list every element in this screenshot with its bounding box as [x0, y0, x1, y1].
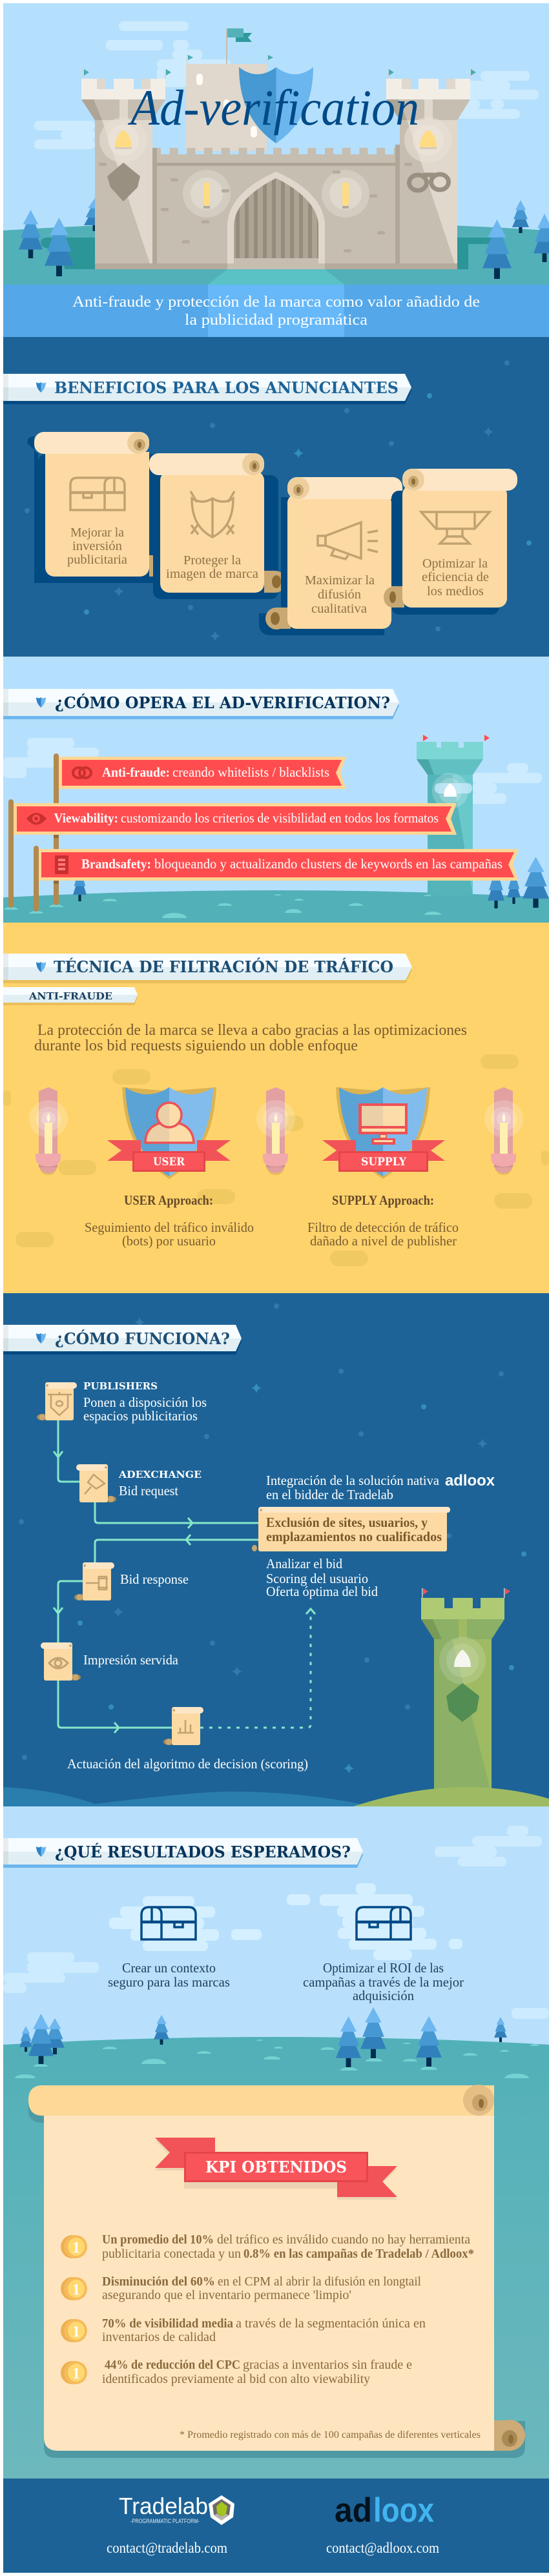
subtitle: Anti-fraude y protección de la marca como valor añadido de — [72, 294, 480, 311]
intro text — [34, 1022, 467, 1054]
footnote: * Promedio registrado con más de 100 campañas de diferentes verticales — [180, 2429, 481, 2440]
text: los medios — [427, 584, 484, 598]
kpi ribbon: KPI OBTENIDOS — [205, 2158, 347, 2176]
result text 2 — [303, 1960, 464, 2003]
text: imagen de marca — [166, 567, 258, 581]
text: customizando los criterios de visibilidad en todos los formatos — [121, 810, 439, 826]
user approach text: USER Approach: — [124, 1192, 213, 1208]
step: publishers — [37, 1380, 207, 1424]
kpi 4: 44% de reducción del CPC — [105, 2358, 240, 2372]
flow lines — [54, 1420, 315, 1733]
panel: kpi scroll — [28, 2085, 525, 2458]
text: Bid request — [119, 1483, 178, 1498]
road — [208, 269, 344, 285]
logo: adloox: ad — [335, 2491, 372, 2530]
candle 2 — [256, 1087, 295, 1175]
central keep — [186, 64, 267, 151]
step: algoritmo — [67, 1707, 308, 1772]
integration text: en el bidder de Tradelab — [266, 1487, 393, 1502]
text: espacios publicitarios — [83, 1408, 198, 1424]
panel: como funciona — [3, 1293, 549, 1806]
heading — [3, 1838, 363, 1868]
kpi 2 — [61, 2274, 421, 2302]
user approach text: (bots) por usuario — [122, 1233, 216, 1249]
left tower — [81, 69, 171, 269]
text: Bid response — [120, 1571, 189, 1587]
dots and stars — [19, 1303, 526, 1774]
icon: user — [145, 1103, 194, 1143]
heading: ¿QUÉ RESULTADOS ESPERAMOS? — [55, 1843, 351, 1861]
analysis text: Oferta óptima del bid — [266, 1584, 378, 1599]
panel: footer — [3, 2479, 549, 2573]
ribbon: SUPPLY — [361, 1156, 407, 1169]
flag 1: anti-fraude — [54, 753, 346, 905]
blobs — [3, 1054, 549, 1266]
shadow — [28, 2101, 525, 2458]
logo: tradelab: -PROGRAMMATIC PLATFORM- — [130, 2518, 200, 2524]
heading: ¿CÓMO FUNCIONA? — [55, 1329, 230, 1348]
text: Brandsafety: — [81, 856, 151, 872]
kpi 1: 1 — [72, 2240, 80, 2256]
body — [44, 2111, 494, 2451]
text — [166, 553, 258, 581]
heading — [3, 954, 412, 983]
text — [305, 573, 375, 616]
analysis text — [266, 1556, 378, 1599]
tower — [417, 735, 490, 895]
text: Actuación del algoritmo de decision (scoring) — [67, 1756, 308, 1772]
kpi ribbon — [155, 2138, 397, 2200]
text: Mejorar la — [70, 526, 124, 540]
text — [102, 764, 329, 780]
panel: beneficios — [3, 337, 549, 657]
ribbon — [322, 1140, 445, 1172]
logo: tradelab: Tradelab — [119, 2493, 208, 2519]
clouds — [3, 738, 542, 804]
text — [266, 1515, 442, 1544]
kpi 2: en el CPM al abrir la difusión en longtail — [218, 2274, 421, 2289]
text: inversión — [72, 539, 122, 553]
kpi 4 — [61, 2358, 412, 2386]
scroll 2 — [149, 453, 286, 599]
text — [83, 1380, 207, 1424]
icon: tower shield — [107, 163, 140, 201]
step: bid response — [74, 1562, 189, 1600]
user approach text — [85, 1192, 254, 1249]
kpi 3: a través de la segmentación única en — [236, 2316, 426, 2331]
green tower — [421, 1588, 510, 1794]
kpi 1: 0.8% en las campañas de Tradelab / Adloox* — [243, 2247, 474, 2261]
icon: bars — [178, 1720, 194, 1733]
result text 1: Crear un contexto — [122, 1960, 216, 1976]
result text 2: campañas a través de la mejor — [303, 1974, 464, 1990]
text — [422, 557, 489, 598]
kpi 1: publicitaria conectada y un — [102, 2247, 241, 2261]
icon: anvil — [421, 512, 490, 544]
logo: tradelab — [119, 2493, 234, 2525]
green hill — [353, 1787, 549, 1806]
bumps — [15, 2039, 539, 2078]
supply approach text: SUPPLY Approach: — [332, 1192, 434, 1208]
kpi 4: gracias a inventarios sin fraude e — [243, 2358, 412, 2372]
heading — [3, 374, 411, 404]
kpi 3 — [61, 2316, 426, 2344]
intro text: durante los bid requests siguiendo un doble enfoque — [34, 1038, 358, 1054]
gate — [227, 172, 325, 269]
result text 1 — [108, 1960, 230, 1990]
clouds behind chests — [109, 1883, 462, 1960]
icon: chest left — [141, 1907, 196, 1939]
result text 2: Optimizar el ROI de las — [323, 1960, 444, 1976]
kpi 1: Un promedio del 10% — [102, 2233, 214, 2247]
integration text: Integración de la solución nativa — [266, 1473, 440, 1488]
text — [67, 526, 127, 567]
result text 2: adquisición — [353, 1988, 414, 2003]
icon: banner — [48, 1392, 72, 1415]
icon: gavel side — [86, 1577, 108, 1590]
text — [118, 1469, 202, 1498]
logo: adloox: adloox — [445, 1472, 495, 1489]
text: emplazamientos no cualificados — [266, 1529, 442, 1544]
ground hill — [3, 222, 549, 285]
text: difusión — [318, 588, 361, 602]
stones — [99, 163, 412, 252]
trees — [19, 2007, 507, 2067]
dark ground patches — [41, 238, 493, 269]
text: Viewability: — [54, 810, 118, 826]
flag on keep — [226, 28, 252, 64]
text: publicitaria — [67, 553, 127, 567]
kpi 3: 70% de visibilidad media — [102, 2316, 233, 2331]
kpi 2: Disminución del 60% — [102, 2274, 215, 2289]
exclusion scroll — [252, 1507, 450, 1551]
shield: user — [107, 1087, 231, 1179]
result text 1: seguro para las marcas — [108, 1974, 230, 1990]
heading: TÉCNICA DE FILTRACIÓN DE TRÁFICO — [54, 957, 393, 976]
bottom curl — [484, 2420, 525, 2451]
subtitle band — [3, 285, 549, 337]
text: ADEXCHANGE — [118, 1469, 202, 1480]
ribbon — [107, 1140, 231, 1172]
user approach text: Seguimiento del tráfico inválido — [85, 1220, 254, 1235]
logo: adloox: loox — [373, 2491, 434, 2530]
clouds — [34, 21, 539, 149]
icon: crest with swords — [191, 491, 234, 537]
bumps — [4, 894, 441, 918]
text: cualitativa — [311, 602, 367, 616]
contact tradelab: contact@tradelab.com — [107, 2540, 227, 2556]
top roll — [28, 2085, 494, 2116]
icon: chest — [70, 478, 125, 510]
title: Ad-verification — [127, 79, 419, 136]
step: adexchange — [76, 1464, 202, 1502]
subtitle — [72, 294, 480, 329]
candle 3 — [484, 1087, 523, 1175]
step: impresion — [41, 1642, 179, 1681]
integration text — [266, 1473, 440, 1502]
icon: monitor — [358, 1103, 408, 1145]
sub heading — [3, 987, 138, 1005]
text: PUBLISHERS — [83, 1380, 158, 1392]
heading: ¿CÓMO OPERA EL AD-VERIFICATION? — [55, 693, 390, 712]
analysis text: Scoring del usuario — [266, 1571, 368, 1586]
candle 1 — [29, 1087, 68, 1175]
keep small flags — [187, 55, 273, 64]
icon: chest right — [357, 1907, 411, 1939]
ground — [3, 890, 549, 923]
text: eficiencia de — [422, 570, 489, 584]
intro text: La protección de la marca se lleva a cabo gracias a las optimizaciones — [37, 1022, 467, 1039]
kpi 4: identificados previamente al bid con alto viewability — [102, 2372, 370, 2386]
kpi 1 — [61, 2233, 474, 2261]
blue hills — [3, 1787, 373, 1806]
scroll 1 — [27, 432, 171, 583]
icon: eye — [49, 1658, 68, 1668]
icon: bars — [55, 855, 68, 874]
kpi 2: asegurando que el inventario permanece 'limpio' — [102, 2288, 351, 2302]
background trees — [19, 198, 549, 279]
big blue shield — [239, 67, 313, 143]
heading: BENEFICIOS PARA LOS ANUNCIANTES — [54, 378, 399, 397]
heading — [3, 1325, 242, 1354]
subtitle: la publicidad programática — [185, 312, 368, 329]
text: Impresión servida — [83, 1652, 179, 1668]
curtain wall — [95, 145, 457, 269]
text: Optimizar la — [422, 557, 488, 571]
text: creando whitelists / blacklists — [172, 764, 329, 780]
supply approach text: Filtro de detección de tráfico — [307, 1220, 459, 1235]
supply approach text: dañado a nivel de publisher — [310, 1233, 457, 1249]
panel: como opera — [3, 657, 549, 923]
logo: adloox — [335, 2491, 434, 2530]
icon: eye — [26, 813, 47, 825]
clouds — [3, 1826, 549, 2019]
ground — [3, 2037, 549, 2479]
panel: hero castle — [3, 3, 549, 337]
text: Anti-fraude: — [102, 764, 170, 780]
kpi 1: del tráfico es inválido cuando no hay herramienta — [217, 2233, 470, 2247]
text: bloqueando y actualizando clusters de keywords en las campañas — [154, 856, 502, 872]
icon: binoculars — [409, 174, 448, 190]
icon: megaphone — [318, 522, 378, 559]
flag 3: brandsafety — [34, 846, 519, 912]
icon: gavel — [85, 1475, 105, 1494]
right tower — [386, 69, 476, 269]
flag 2: viewability — [8, 799, 457, 908]
text: Proteger la — [183, 553, 241, 567]
kpi 3: inventarios de calidad — [102, 2330, 216, 2344]
icon: rings — [73, 768, 91, 778]
contact adloox: contact@adloox.com — [326, 2540, 439, 2556]
trees — [73, 857, 549, 908]
text: Exclusión de sites, usuarios, y — [266, 1515, 428, 1530]
ribbon: USER — [153, 1156, 185, 1169]
supply approach text — [307, 1192, 459, 1249]
shield: supply — [322, 1087, 445, 1179]
analysis text: Analizar el bid — [266, 1556, 342, 1571]
panel: resultados — [3, 1806, 549, 2479]
text: Ponen a disposición los — [83, 1395, 207, 1410]
wall windows — [183, 170, 369, 218]
scroll 4 — [384, 469, 517, 615]
scroll 3 — [259, 477, 402, 635]
sub heading: ANTI-FRAUDE — [28, 990, 112, 1002]
heading — [3, 689, 399, 719]
dots and stars — [25, 360, 532, 641]
panel: tecnica de filtracion — [3, 923, 549, 1293]
text: Maximizar la — [305, 573, 375, 588]
